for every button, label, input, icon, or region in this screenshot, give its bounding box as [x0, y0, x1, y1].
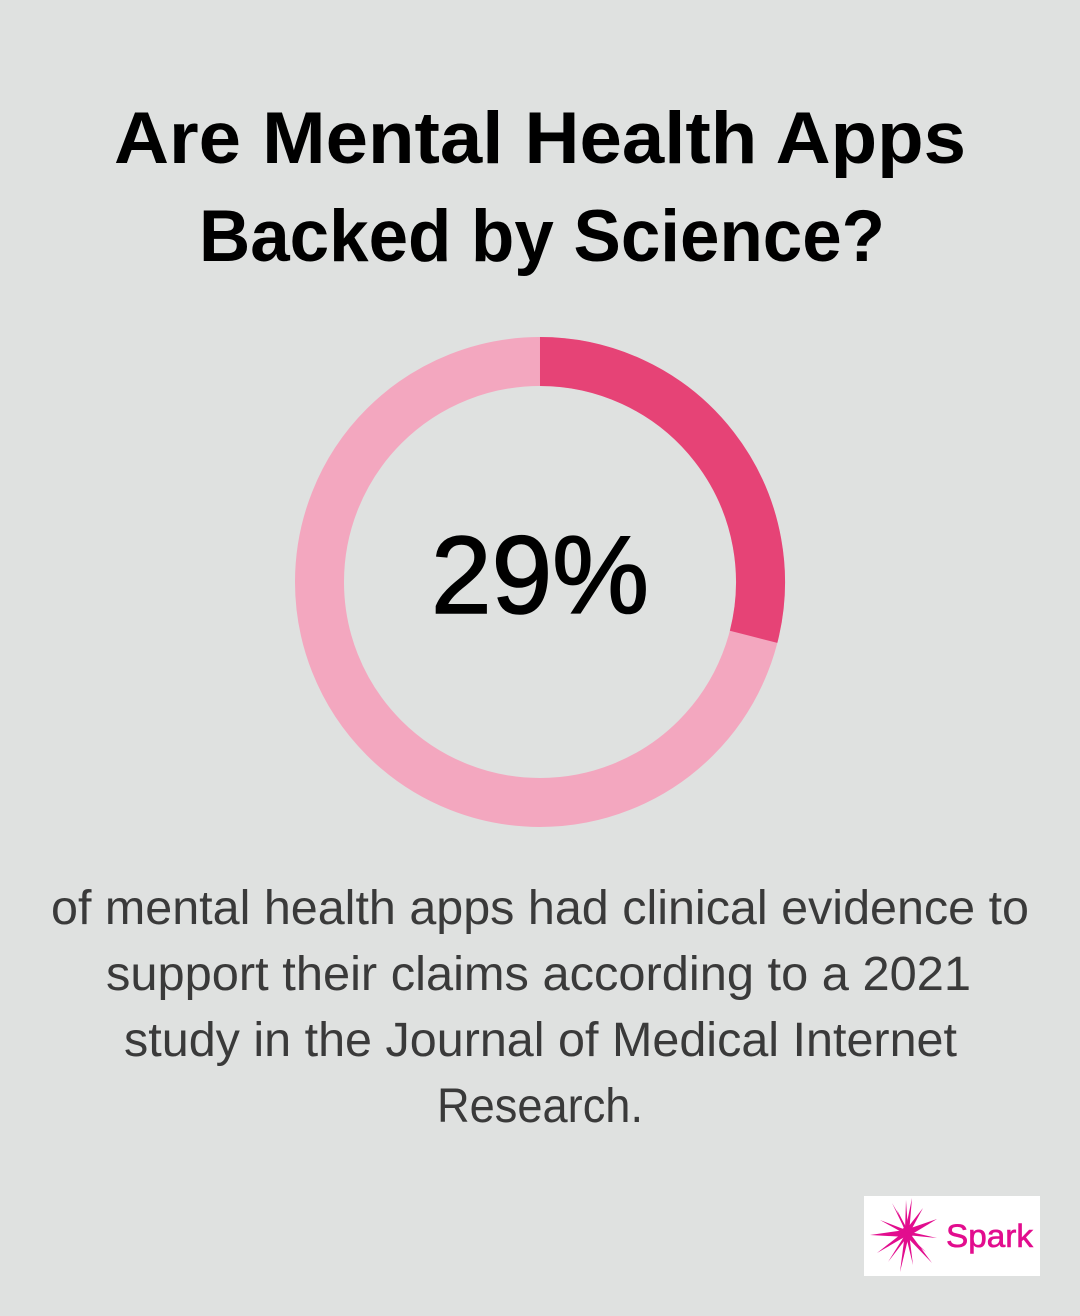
logo: Spark: [864, 1196, 1040, 1276]
description text: of mental health apps had clinical evidence to: [51, 882, 1029, 935]
donut track: [320, 362, 760, 802]
title: Are Mental Health Apps: [114, 98, 966, 179]
donut chart: 29%: [320, 362, 761, 802]
description text: study in the Journal of Medical Internet: [124, 1014, 957, 1067]
icon: starburst: [870, 1198, 937, 1272]
donut highlighted segment: [540, 362, 761, 637]
description text: support their claims according to a 2021: [106, 948, 971, 1001]
title: Backed by Science?: [199, 196, 885, 277]
big number: 29%: [431, 514, 649, 637]
description text: [51, 882, 1029, 1133]
title: [114, 98, 966, 277]
logo wordmark: Spark: [946, 1218, 1034, 1254]
description text: Research.: [437, 1080, 643, 1133]
